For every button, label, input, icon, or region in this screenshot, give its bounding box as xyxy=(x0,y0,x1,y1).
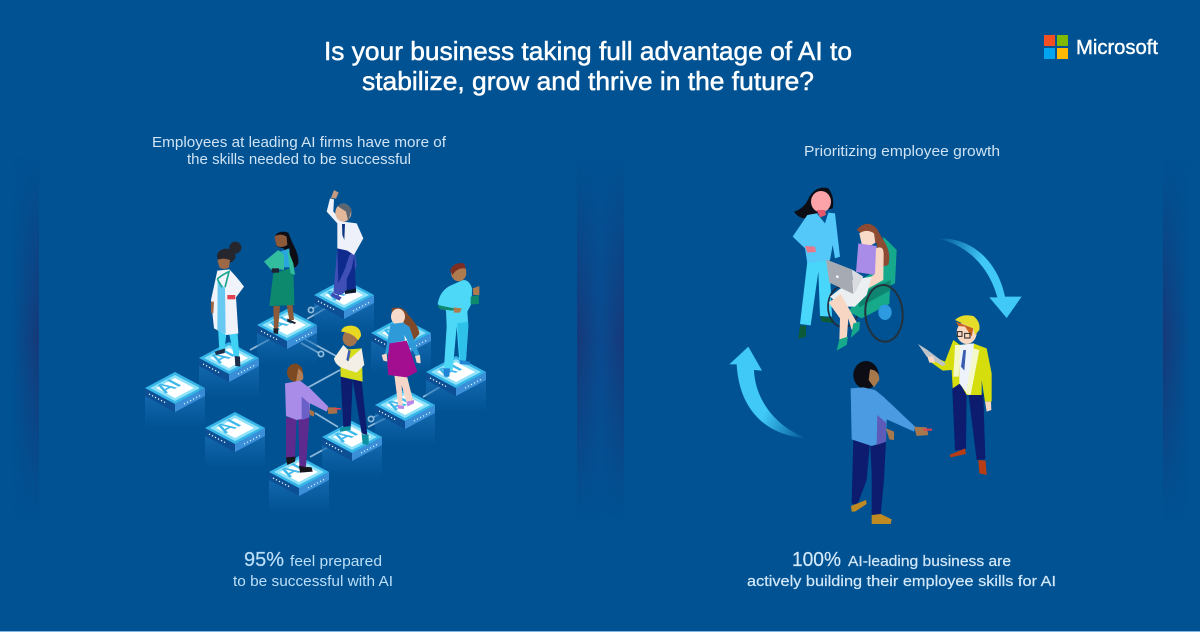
person: man in scrubs xyxy=(438,263,479,377)
person: woman in dress xyxy=(382,307,421,409)
panel edge shadows xyxy=(20,212,1182,462)
platform: woman in dress xyxy=(375,389,435,445)
left panel heading xyxy=(152,135,447,168)
stat: 100% xyxy=(747,549,1056,590)
right panel heading: Prioritizing employee growth xyxy=(804,144,1000,160)
person: engineer with tablet xyxy=(918,315,992,475)
growth cycle illustration xyxy=(729,188,1022,524)
stat: 100%: 100% xyxy=(792,549,841,571)
person: waving man xyxy=(327,190,363,301)
stat: 100%: actively building their employee skills for AI xyxy=(747,574,1056,590)
stat: 95%: to be successful with AI xyxy=(233,574,393,590)
bottom edge line xyxy=(0,631,1200,632)
person: engineer with crossed arms xyxy=(334,326,369,445)
platform: man in purple xyxy=(269,456,329,512)
title xyxy=(324,36,852,96)
platform: man in scrubs xyxy=(426,356,486,412)
platform: far left: AI xyxy=(150,377,187,396)
title: Is your business taking full advantage of AI to xyxy=(324,36,852,66)
platform: back right: AI xyxy=(376,322,413,341)
platform: man waving xyxy=(314,279,374,335)
platform: woman in green: AI xyxy=(262,314,299,333)
stat: 95%: feel prepared xyxy=(290,554,382,570)
connector lines xyxy=(250,303,445,457)
people on platforms xyxy=(211,190,369,473)
platform: doctor xyxy=(199,342,259,398)
AI platforms grid xyxy=(145,279,486,512)
platform: far left xyxy=(145,372,205,428)
stat: 100%: AI-leading business are xyxy=(848,554,1011,570)
platform: woman in dress: AI xyxy=(380,394,417,413)
person: woman in wheelchair xyxy=(826,224,905,351)
platform: engineer xyxy=(322,421,382,477)
left panel heading: the skills needed to be successful xyxy=(187,152,411,168)
platform: man in scrubs: AI xyxy=(431,361,468,380)
person: man in blue jacket xyxy=(851,361,932,524)
person: man in purple xyxy=(285,364,341,473)
platform: engineer: AI xyxy=(327,426,364,445)
platform: man waving: AI xyxy=(319,284,356,303)
platform: lower left: AI xyxy=(210,417,247,436)
left panel heading: Employees at leading AI firms have more of xyxy=(152,135,447,151)
platform: back right xyxy=(371,317,431,373)
platform: lower left xyxy=(205,412,265,468)
person: standing woman xyxy=(793,188,840,339)
arrow: top right xyxy=(937,238,1022,318)
stat: 95%: 95% xyxy=(244,549,284,571)
Microsoft logo xyxy=(1044,35,1158,59)
platform: man in purple: AI xyxy=(274,461,311,480)
title: stabilize, grow and thrive in the future? xyxy=(362,66,814,96)
person: doctor xyxy=(211,242,244,367)
platform: woman in green xyxy=(257,309,317,365)
platform: doctor: AI xyxy=(204,347,241,366)
Microsoft logo: Microsoft xyxy=(1076,37,1158,59)
person: woman in green xyxy=(264,232,298,334)
arrow: left xyxy=(729,347,808,438)
stat: 95% xyxy=(233,549,393,590)
